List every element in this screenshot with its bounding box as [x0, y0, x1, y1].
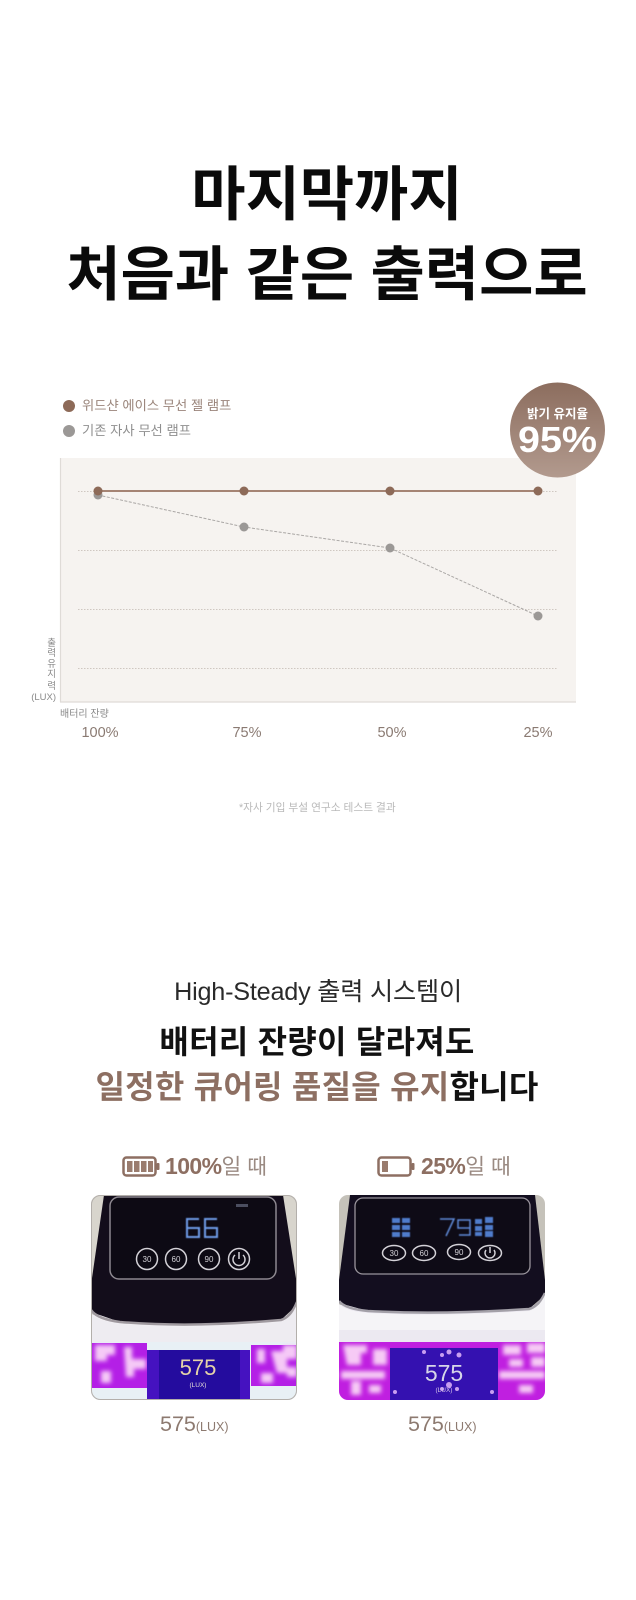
photo: lamp at 25% battery: 575 — [425, 1360, 463, 1386]
footnote: *자사 기입 부설 연구소 테스트 결과 — [239, 802, 396, 814]
y axis label: (LUX) — [31, 692, 56, 703]
x axis title: 배터리 잔량 — [60, 708, 109, 720]
caption: 575 lux at 25%: 575(LUX) — [408, 1412, 477, 1436]
photo: lamp at 25% battery: (LUX) — [436, 1387, 452, 1394]
title — [66, 162, 588, 308]
photo: lamp at 100% battery — [91, 1195, 297, 1400]
badge: brightness retention 95%: 95% — [518, 419, 597, 460]
y axis label: 출 — [47, 638, 56, 649]
photo: lamp at 100% battery: 90 — [205, 1255, 214, 1264]
photo: lamp at 100% battery: 575 — [180, 1355, 216, 1380]
photo: lamp at 100% battery: 60 — [172, 1255, 181, 1264]
x axis labels: 50% — [377, 725, 407, 741]
title: 처음과 같은 출력으로 — [66, 242, 588, 308]
badge: brightness retention 95% — [510, 382, 605, 478]
legend item: wireless gel lamp: 위드샨 에이스 무선 젤 램프 — [82, 398, 231, 413]
series: wireless gel lamp — [94, 486, 542, 496]
label: 100%: 100%일 때 — [165, 1153, 267, 1179]
legend item: existing lamp: 기존 자사 무선 램프 — [82, 423, 191, 438]
photo: lamp at 25% battery: 90 — [455, 1248, 464, 1257]
photo: lamp at 25% battery: 60 — [420, 1249, 429, 1258]
photo: lamp at 100% battery: (LUX) — [190, 1382, 206, 1389]
heading — [95, 1024, 539, 1105]
line chart — [31, 458, 576, 741]
title: 마지막까지 — [191, 162, 463, 228]
y axis label: 유 — [47, 659, 56, 670]
badge: brightness retention 95%: 밝기 유지율 — [527, 406, 588, 421]
y axis label: 지 — [47, 669, 56, 680]
icon: low battery — [377, 1156, 414, 1177]
x axis labels: 100% — [81, 725, 119, 741]
photo: lamp at 25% battery — [339, 1195, 545, 1400]
y axis label — [31, 638, 56, 703]
y axis label: 력 — [47, 647, 56, 659]
label: 25%: 25%일 때 — [421, 1153, 511, 1179]
y axis label: 력 — [47, 680, 56, 692]
legend — [63, 398, 231, 438]
x axis labels: 75% — [232, 725, 262, 741]
series: existing lamp — [94, 490, 542, 620]
photo: lamp at 100% battery: 30 — [143, 1255, 152, 1264]
photo: lamp at 25% battery: 30 — [390, 1249, 399, 1258]
x axis labels — [81, 725, 553, 741]
icon: full battery — [122, 1156, 160, 1177]
subheading: High-Steady 출력 시스템이 — [174, 978, 462, 1006]
label: 25% — [377, 1153, 511, 1179]
x axis labels: 25% — [523, 725, 553, 741]
heading: 배터리 잔량이 달라져도 — [159, 1024, 475, 1060]
caption: 575 lux at 100%: 575(LUX) — [160, 1412, 229, 1436]
heading: 일정한 큐어링 품질을 유지합니다 — [95, 1069, 539, 1105]
